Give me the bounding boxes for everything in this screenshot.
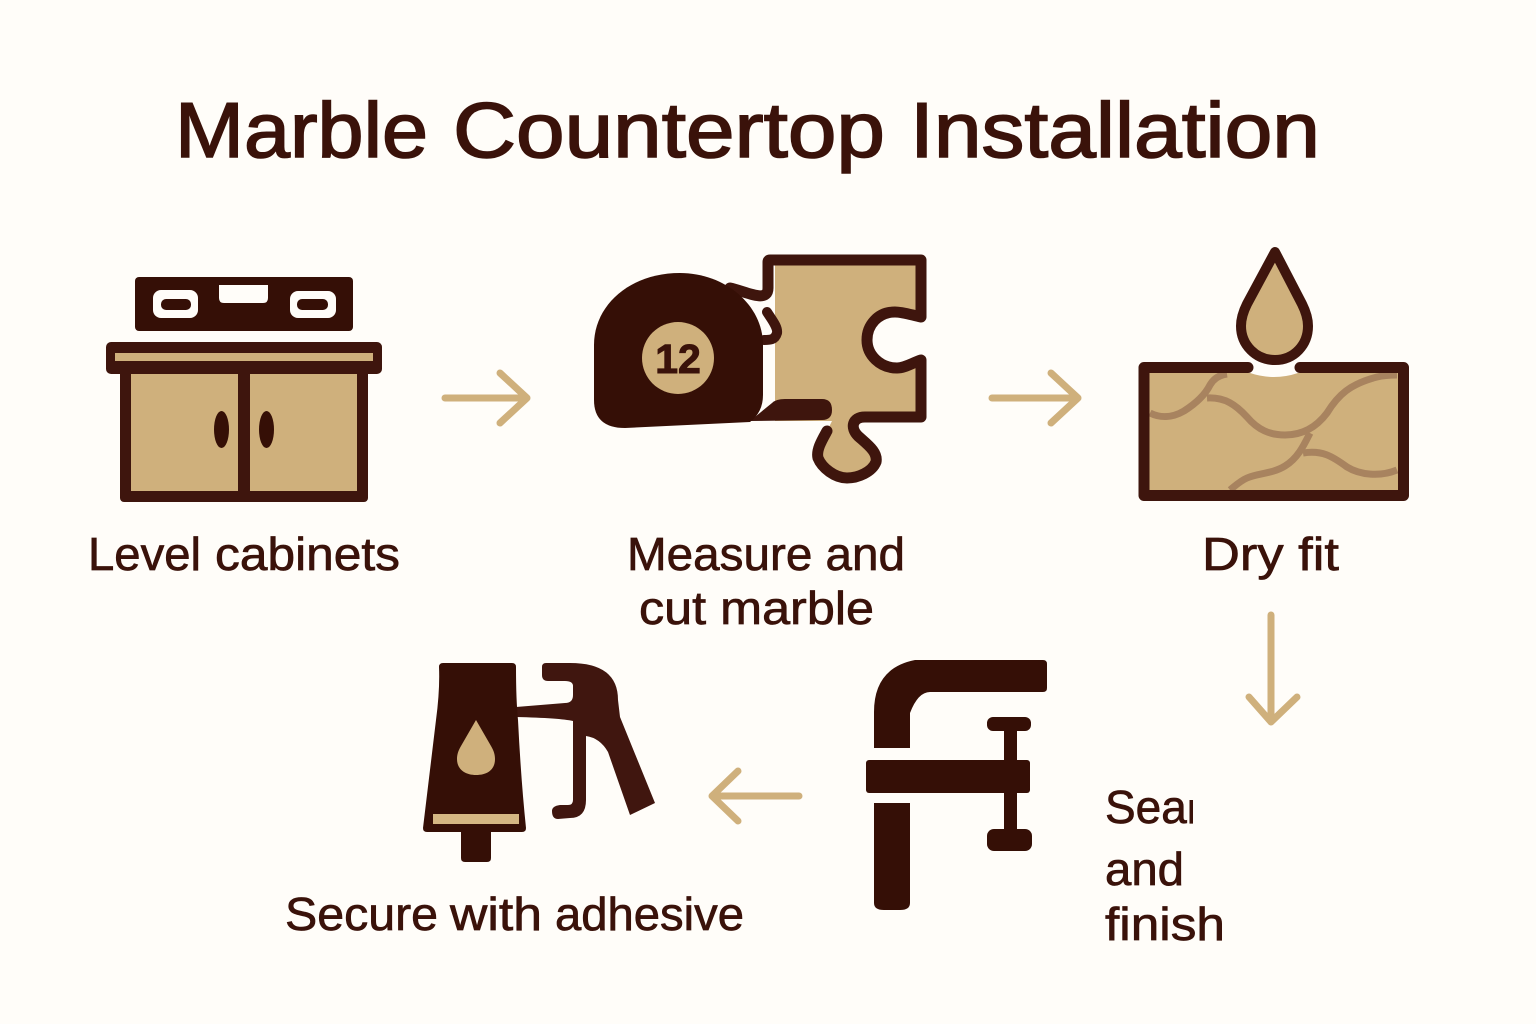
label: secure with adhesive: with xyxy=(449,888,542,940)
arrow: step 1 to 2 xyxy=(445,373,527,423)
title: Installation xyxy=(910,86,1320,174)
title xyxy=(175,86,1320,174)
icon: adhesive tube xyxy=(423,663,526,862)
label: measure and cut marble xyxy=(627,528,905,634)
icon: clamp xyxy=(866,660,1047,910)
label: seal and finish xyxy=(1105,780,1225,950)
icon: level on cabinet xyxy=(106,277,382,502)
label: seal and finish: finish xyxy=(1105,898,1225,950)
label: measure and cut marble: cut marble xyxy=(639,582,874,634)
icon: puzzle piece xyxy=(730,260,921,478)
label: secure with adhesive: adhesive xyxy=(555,888,744,940)
icon: water drop xyxy=(1241,252,1308,360)
icon: adhesive tube and gun xyxy=(423,663,655,862)
icon: caulk gun xyxy=(516,663,655,819)
label: measure and cut marble: Measure and xyxy=(627,528,905,580)
label: level cabinets: Level xyxy=(88,528,201,580)
icon: tape measure: 12 xyxy=(655,336,701,382)
arrow: step 4 to 5 xyxy=(712,771,799,821)
icon: marble slab with drop xyxy=(1144,252,1404,496)
label: level cabinets: cabinets xyxy=(215,528,400,580)
label: secure with adhesive xyxy=(285,888,744,940)
label: secure with adhesive: Secure xyxy=(285,888,438,940)
title: Marble xyxy=(175,86,428,174)
icon: spirit level xyxy=(135,277,353,331)
label: dry fit: Dry fit xyxy=(1202,528,1339,580)
title: Countertop xyxy=(453,86,885,174)
label: seal and finish: Seal xyxy=(1105,781,1197,833)
icon: tape measure and puzzle marble xyxy=(594,260,921,478)
icon: tape measure xyxy=(594,273,763,428)
label: seal and finish: and xyxy=(1105,843,1184,895)
icon: cabinet xyxy=(106,342,382,502)
arrow: step 3 to 4 xyxy=(1249,615,1297,722)
label: level cabinets xyxy=(88,528,400,580)
icon: marble slab xyxy=(1144,368,1404,496)
arrow: step 2 to 3 xyxy=(992,373,1078,423)
